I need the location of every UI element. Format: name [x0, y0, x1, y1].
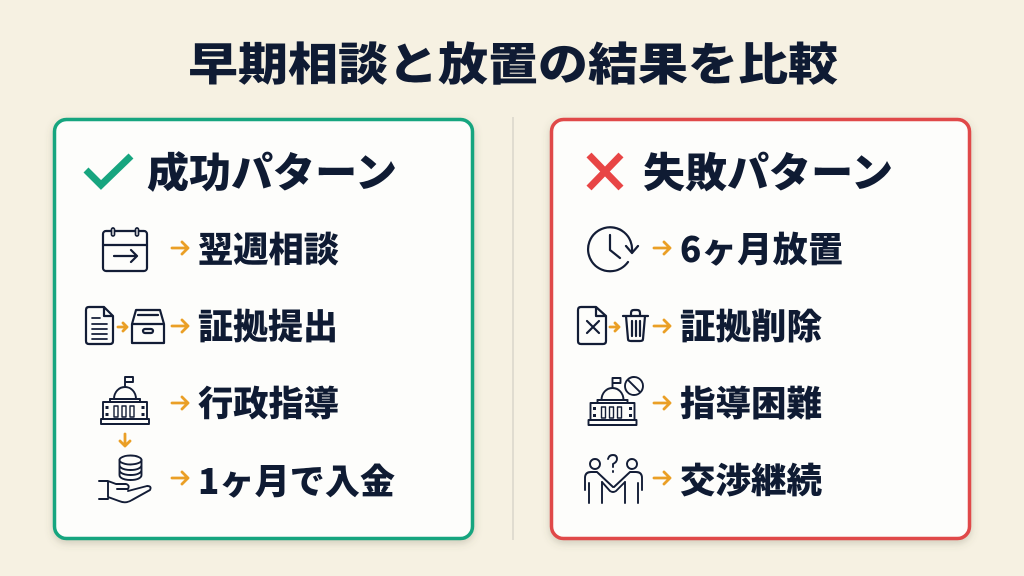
text: left for six months: 6ヶ月放置 [680, 222, 843, 273]
arrow: trash to text [654, 320, 670, 332]
icon: document with cross [578, 307, 606, 344]
text: guidance difficult: 指導困難 [680, 376, 822, 427]
panel frame: failure [552, 120, 970, 538]
heading: success pattern: 成功パターン [147, 139, 397, 199]
text: next week consultation: 翌週相談 [198, 222, 339, 273]
text: paid in one month: 1ヶ月で入金 [198, 454, 395, 505]
icon: building with prohibition sign [588, 377, 643, 425]
icon: archive box [132, 310, 164, 343]
arrow: building to text [172, 397, 188, 409]
text: submit evidence: 証拠提出 [198, 299, 338, 350]
icon: document [86, 307, 113, 344]
title: 早期相談と放置の結果を比較 [188, 28, 838, 93]
arrow: clock to text [654, 242, 670, 254]
panel frame: success [54, 120, 472, 538]
arrow: box to text [172, 320, 188, 332]
heading: failure pattern: 失敗パターン [643, 139, 893, 199]
arrow: people to text [654, 472, 670, 484]
icon: coins on hand [99, 456, 151, 502]
arrow: building to text [654, 397, 670, 409]
icon: calendar [103, 228, 147, 271]
arrow: coins to text [172, 472, 188, 484]
arrow: document to box [118, 323, 127, 331]
text: evidence deleted: 証拠削除 [680, 299, 822, 350]
icon: two people negotiating [585, 455, 642, 503]
text: negotiation continues: 交渉継続 [680, 453, 822, 504]
icon: government building [101, 377, 149, 424]
icon: trash can [623, 310, 648, 341]
icon: cross mark [589, 155, 621, 188]
arrow: calendar to text [172, 242, 188, 254]
panel: failure pattern [552, 120, 970, 538]
icon: clock with arrow [588, 227, 638, 271]
panel: success pattern [54, 120, 472, 538]
text: administrative guidance: 行政指導 [198, 376, 339, 427]
arrow: down from building [120, 434, 130, 446]
icon: check mark [86, 156, 131, 185]
arrow: document to trash [610, 323, 619, 331]
